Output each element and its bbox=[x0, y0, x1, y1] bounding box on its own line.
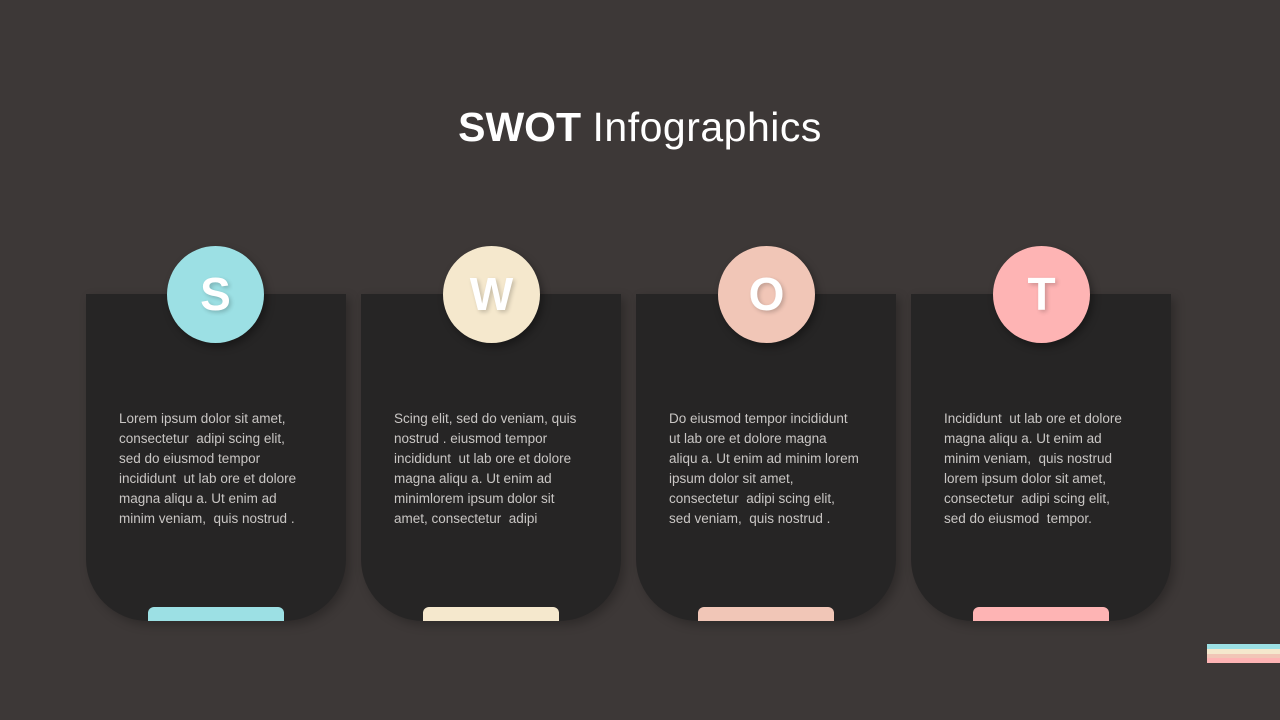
icon: W circle bbox=[443, 246, 540, 343]
panel: strengths bbox=[86, 294, 346, 621]
text: weaknesses: incididunt ut lab ore et dolore bbox=[394, 451, 571, 466]
text: threats bbox=[944, 411, 1122, 526]
text: opportunities: aliqu a. Ut enim ad minim lorem bbox=[669, 451, 859, 466]
text: weaknesses: magna aliqu a. Ut enim ad bbox=[394, 471, 552, 486]
text: strengths bbox=[119, 411, 296, 526]
text: weaknesses: Scing elit, sed do veniam, quis bbox=[394, 411, 576, 426]
icon: S circle: S bbox=[200, 268, 231, 320]
panel: opportunities bbox=[636, 294, 896, 621]
text: opportunities bbox=[669, 411, 859, 526]
text: weaknesses bbox=[394, 411, 576, 526]
text: opportunities: consectetur adipi scing elit, bbox=[669, 491, 835, 506]
text: weaknesses: nostrud . eiusmod tempor bbox=[394, 431, 547, 446]
icon: S circle bbox=[167, 246, 264, 343]
text: strengths: incididunt ut lab ore et dolore bbox=[119, 471, 296, 486]
text: strengths: minim veniam, quis nostrud . bbox=[119, 511, 295, 526]
title: SWOT Infographics bbox=[458, 104, 822, 150]
tab: threats bbox=[973, 607, 1109, 621]
text: strengths: sed do eiusmod tempor bbox=[119, 451, 260, 466]
icon: O circle: O bbox=[749, 268, 784, 320]
text: strengths: Lorem ipsum dolor sit amet, bbox=[119, 411, 286, 426]
text: weaknesses: amet, consectetur adipi bbox=[394, 511, 537, 526]
text: opportunities: ut lab ore et dolore magna bbox=[669, 431, 827, 446]
text: threats: sed do eiusmod tempor. bbox=[944, 511, 1092, 526]
text: strengths: consectetur adipi scing elit, bbox=[119, 431, 285, 446]
panel: threats bbox=[911, 294, 1171, 621]
text: threats: consectetur adipi scing elit, bbox=[944, 491, 1110, 506]
icon: T circle bbox=[993, 246, 1090, 343]
tab: strengths bbox=[148, 607, 284, 621]
text: strengths: magna aliqu a. Ut enim ad bbox=[119, 491, 277, 506]
text: opportunities: ipsum dolor sit amet, bbox=[669, 471, 794, 486]
text: opportunities: Do eiusmod tempor incididunt bbox=[669, 411, 848, 426]
icon: T circle: T bbox=[1027, 268, 1056, 320]
decorative stripes bbox=[1207, 644, 1280, 663]
text: threats: lorem ipsum dolor sit amet, bbox=[944, 471, 1106, 486]
text: threats: Incididunt ut lab ore et dolore bbox=[944, 411, 1122, 426]
tab: weaknesses bbox=[423, 607, 559, 621]
text: opportunities: sed veniam, quis nostrud . bbox=[669, 511, 830, 526]
panel: weaknesses bbox=[361, 294, 621, 621]
icon: O circle bbox=[718, 246, 815, 343]
text: threats: minim veniam, quis nostrud bbox=[944, 451, 1112, 466]
tab: opportunities bbox=[698, 607, 834, 621]
text: weaknesses: minimlorem ipsum dolor sit bbox=[394, 491, 555, 506]
icon: W circle: W bbox=[470, 268, 513, 320]
text: threats: magna aliqu a. Ut enim ad bbox=[944, 431, 1102, 446]
